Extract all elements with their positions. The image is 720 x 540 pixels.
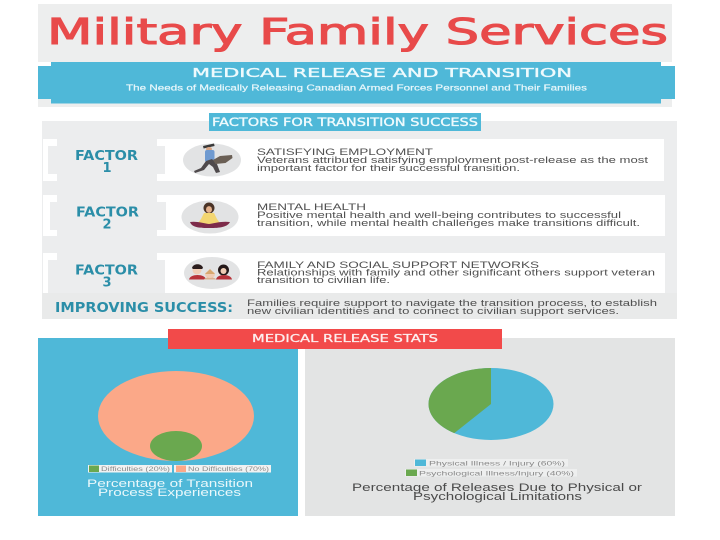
legend: difficulties: No Difficulties (70%) [188, 466, 269, 473]
factor 1 text: SATISFYING EMPLOYMENT [257, 147, 433, 158]
factor 1 text: Veterans attributed satisfying employment post-release as the most [257, 155, 648, 166]
section label: medical release stats: MEDICAL RELEASE STATS [252, 333, 438, 345]
chart title: transition [87, 478, 253, 499]
legend: releases: Physical Illness / Injury (60%) [429, 460, 565, 468]
icon: family [184, 257, 240, 289]
legend: releases [405, 459, 577, 478]
section label: factors: FACTORS FOR TRANSITION SUCCESS [212, 115, 478, 129]
factor 3 text [257, 260, 655, 286]
section label: medical release stats [168, 329, 502, 349]
improving success text: Families require support to navigate the transition process, to establish [247, 298, 657, 309]
factor 2 row: 2 [102, 218, 112, 232]
banner: medical release and transition [38, 62, 675, 104]
factor 2 label: FACTOR [76, 206, 139, 220]
factor 3 text: Relationships with family and other significant others support veteran [257, 268, 655, 278]
pie chart [428, 368, 554, 440]
factor 3 row: 3 [102, 276, 112, 290]
factor 1 row [43, 139, 664, 181]
improving success text [247, 298, 657, 317]
panel: releases chart [305, 338, 675, 516]
banner heading: MEDICAL RELEASE AND TRANSITION [192, 65, 572, 80]
chart title: releases: Psychological Limitations [413, 491, 583, 503]
title: Military Family Services [47, 12, 668, 53]
bubble chart [98, 371, 254, 461]
factor 1 text [257, 147, 648, 174]
legend: difficulties: Difficulties (20%) [101, 466, 170, 473]
factor 3 label: FACTOR [75, 264, 138, 278]
legend: releases: Psychological Illness/Injury (40%) [419, 470, 574, 478]
panel: transition process chart [38, 338, 298, 516]
factor 1 text: important factor for their successful transition. [257, 163, 520, 174]
improving success heading: IMPROVING SUCCESS: [55, 300, 233, 316]
legend: difficulties [88, 465, 271, 473]
icon: meditating person [182, 200, 238, 234]
section label: factors [209, 113, 481, 131]
banner subtitle: The Needs of Medically Releasing Canadian Armed Forces Personnel and Their Families [126, 82, 587, 92]
factor 2 text: transition, while mental health challenges make transitions difficult. [257, 218, 640, 229]
chart title: releases: Percentage of Releases Due to Physical or [352, 482, 642, 494]
chart title: transition: Percentage of Transition [87, 478, 253, 490]
chart title: transition: Process Experiences [98, 487, 242, 499]
factor 2 text [250, 195, 640, 229]
factor 2 row [43, 195, 665, 236]
icon: walking worker with laptop [183, 144, 241, 176]
improving success [42, 293, 677, 319]
factor 1 label: FACTOR [75, 149, 138, 164]
header panel [38, 4, 675, 107]
factor 2 text: MENTAL HEALTH [257, 202, 366, 213]
panel: factors for transition success [42, 113, 677, 319]
factor 2 text: Positive mental health and well-being contributes to successful [257, 210, 621, 221]
factor 3 text: FAMILY AND SOCIAL SUPPORT NETWORKS [257, 260, 539, 271]
factor 1 row: 1 [102, 161, 112, 176]
improving success text: new civilian identities and to connect to civilian support services. [247, 306, 619, 317]
chart title: releases [352, 482, 642, 503]
factor 3 text: transition to civilian life. [257, 275, 390, 286]
factor 3 row [43, 253, 665, 294]
